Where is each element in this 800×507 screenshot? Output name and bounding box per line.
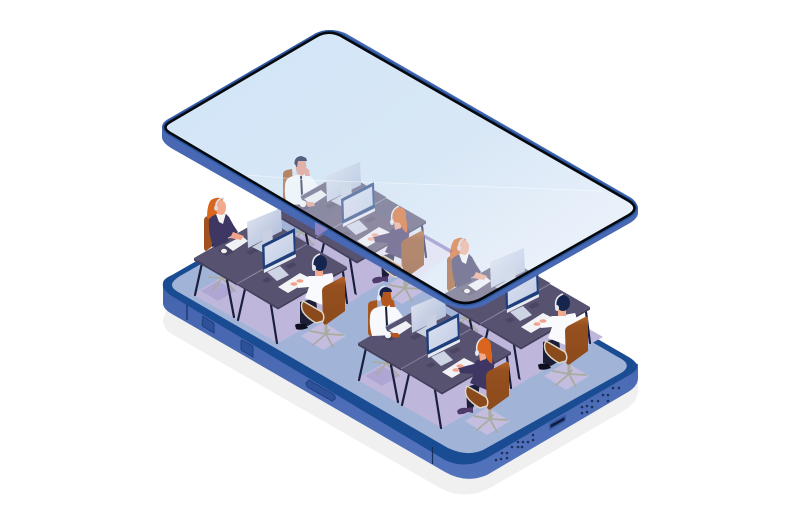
charging port <box>549 415 566 430</box>
workstations behind glass <box>271 155 439 304</box>
phone shadow <box>163 300 638 494</box>
side button three <box>306 380 335 401</box>
lower phone <box>163 188 638 494</box>
side button two <box>241 340 253 357</box>
workstation: man on call and woman, front <box>356 286 524 435</box>
speaker dots left <box>495 434 534 461</box>
side seams <box>187 305 432 464</box>
phone bezel <box>163 188 637 465</box>
upper phone <box>162 30 638 309</box>
pale floor seen through glass <box>423 234 453 254</box>
upper phone rim <box>165 33 635 303</box>
workstation: woman and man, back left <box>192 198 360 350</box>
glass outline <box>165 33 635 303</box>
purple reflection on rim <box>315 222 328 236</box>
speaker dots right <box>581 387 620 414</box>
phone screen <box>172 193 627 453</box>
workstation: woman and man, right <box>435 238 603 390</box>
side button one <box>202 316 214 333</box>
phone body <box>163 283 638 479</box>
glass screen <box>165 33 635 303</box>
scene seen through glass <box>283 154 528 302</box>
glass reflection <box>247 174 603 302</box>
upper phone body <box>162 30 638 309</box>
